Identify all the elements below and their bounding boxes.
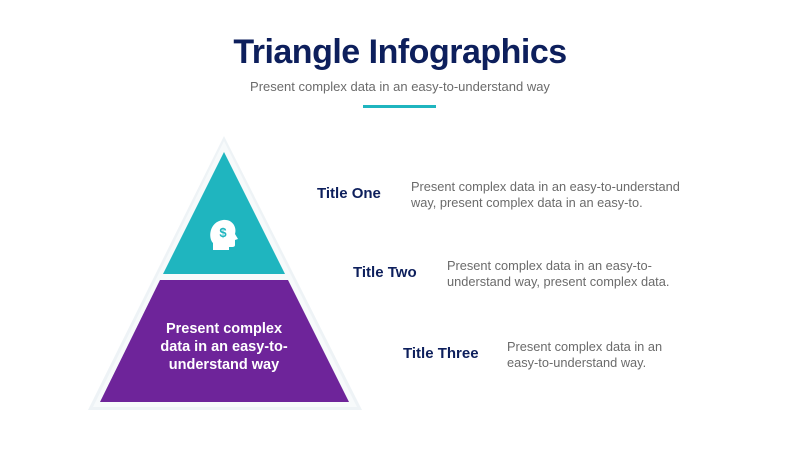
title: Triangle Infographics <box>233 33 567 71</box>
pyramid top: teal <box>163 152 285 274</box>
purple label: Present complex <box>166 321 282 337</box>
text: Present complex data in an easy-to-understand <box>411 179 680 194</box>
item 2: Title Two <box>353 264 417 281</box>
text: way, present complex data in an easy-to. <box>411 195 643 210</box>
pyramid outline <box>88 136 362 410</box>
text: understand way, present complex data. <box>447 274 669 289</box>
pyramid bottom: purple <box>100 280 349 402</box>
text: Present complex data in an easy-to- <box>447 258 652 273</box>
icon: head with dollar <box>210 220 238 250</box>
pyramid bottom: purple: data in an easy-to- <box>160 339 288 355</box>
item 1: Title One <box>317 185 381 202</box>
icon: head with dollar: $ <box>219 225 227 240</box>
text: Present complex data in an <box>507 339 662 354</box>
item 3: Title Three <box>403 345 479 362</box>
pyramid bottom: purple: understand way <box>169 357 279 373</box>
accent underline <box>363 105 436 108</box>
text: easy-to-understand way. <box>507 355 646 370</box>
subtitle: Present complex data in an easy-to-understand way <box>250 79 550 94</box>
